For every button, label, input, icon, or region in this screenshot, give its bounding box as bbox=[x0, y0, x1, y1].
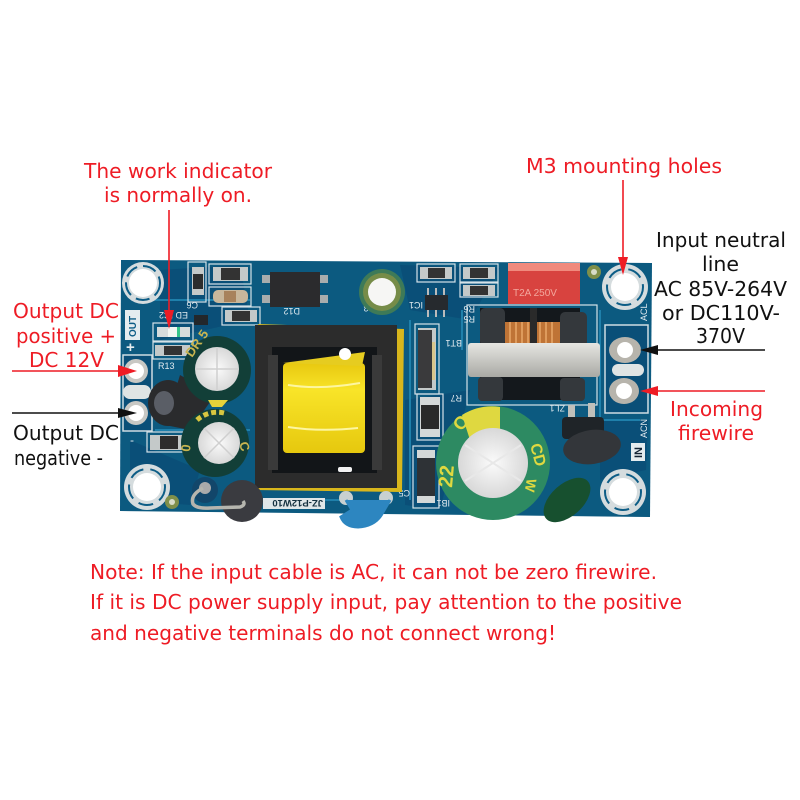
small via bbox=[165, 495, 179, 509]
callout: output DC negative: negative - bbox=[14, 446, 103, 470]
label: OUT: - bbox=[130, 433, 134, 447]
heading: work indicator callout: is normally on. bbox=[104, 183, 252, 207]
large electrolytic capacitor bbox=[435, 406, 550, 520]
capacitor top: DR 5 bbox=[182, 327, 211, 360]
silkscreen labels: IB1 bbox=[436, 498, 450, 508]
large electrolytic capacitor: O bbox=[449, 411, 473, 435]
capacitor bottom: 0 bbox=[178, 444, 194, 452]
transformer part label: JZ-P12W10 bbox=[272, 497, 323, 508]
callout: input neutral line: or DC110V- bbox=[662, 301, 780, 325]
arrow: output positive bbox=[12, 365, 137, 377]
silkscreen labels: ED IC2 bbox=[159, 310, 188, 320]
fuse: T2A 250V bbox=[513, 288, 557, 299]
note text: and negative terminals do not connect wrong! bbox=[90, 621, 556, 645]
input terminal pads bbox=[605, 325, 648, 413]
arrow: input neutral bbox=[640, 345, 765, 355]
capacitor C3 bbox=[359, 269, 405, 315]
capacitor top bbox=[182, 327, 251, 407]
silkscreen labels bbox=[158, 300, 649, 508]
callout: input neutral line: line bbox=[702, 252, 739, 276]
mounting hole top left bbox=[122, 262, 164, 304]
callout: input neutral line bbox=[654, 228, 787, 348]
silkscreen outlines bbox=[147, 262, 597, 508]
heading: mounting holes callout: M3 mounting holes bbox=[526, 154, 722, 178]
arrow: to mounting hole bbox=[618, 180, 628, 275]
arrow: incoming live bbox=[640, 386, 765, 396]
silkscreen labels: C6 bbox=[186, 300, 198, 310]
callout: output DC positive: Output DC bbox=[13, 299, 119, 323]
mounting hole bottom left bbox=[124, 464, 170, 510]
heading: work indicator callout: The work indicator bbox=[83, 159, 273, 183]
callout: output DC negative: Output DC bbox=[13, 421, 119, 445]
panel: circuit board photo bbox=[120, 260, 652, 531]
fuse bbox=[508, 263, 580, 304]
note text: Note: If the input cable is AC, it can not be zero firewire. bbox=[90, 560, 657, 584]
silkscreen labels: R5 bbox=[463, 314, 475, 324]
silkscreen labels: R6 bbox=[463, 304, 475, 314]
callout: incoming firewire: Incoming bbox=[670, 397, 763, 421]
callout: incoming firewire: firewire bbox=[678, 421, 754, 445]
inductor bbox=[148, 375, 215, 430]
green film capacitor bbox=[535, 469, 599, 531]
silkscreen labels: ACN bbox=[639, 419, 649, 438]
transformer bbox=[255, 324, 404, 492]
silkscreen labels: C3 bbox=[363, 303, 375, 313]
silkscreen labels: D12 bbox=[283, 306, 300, 316]
silkscreen labels: ACL bbox=[639, 303, 649, 321]
arrow: to indicator LED bbox=[164, 210, 174, 329]
mounting hole top right bbox=[602, 264, 648, 310]
NTC thermistor bbox=[561, 403, 623, 468]
common mode choke bbox=[468, 308, 600, 401]
label: OUT bbox=[125, 310, 140, 447]
label: OUT: + bbox=[126, 339, 135, 356]
silkscreen labels: IC1 bbox=[409, 300, 423, 310]
callout: output DC positive: positive + bbox=[16, 324, 116, 348]
callout: input neutral line: Input neutral bbox=[656, 228, 786, 252]
capacitor bottom: C bbox=[236, 440, 253, 453]
silkscreen labels: BT1 bbox=[445, 338, 462, 348]
arrow: output negative bbox=[12, 408, 137, 418]
large electrolytic capacitor: CD bbox=[526, 442, 549, 468]
mounting hole bottom right bbox=[600, 469, 646, 515]
heading: work indicator callout bbox=[83, 159, 273, 207]
large electrolytic capacitor: 22 bbox=[435, 464, 459, 488]
silkscreen labels: C5 bbox=[398, 488, 410, 498]
PCB base bbox=[120, 260, 652, 517]
callout: input neutral line: AC 85V-264V bbox=[654, 277, 787, 301]
blue capacitor bbox=[339, 491, 393, 527]
silkscreen labels: R7 bbox=[450, 393, 462, 403]
label: IN bbox=[631, 443, 645, 461]
silkscreen labels: ZL1 bbox=[549, 403, 565, 413]
callout: output DC negative bbox=[13, 421, 119, 470]
silkscreen labels: R13 bbox=[158, 361, 175, 371]
callout: output DC positive bbox=[13, 299, 119, 372]
SMD components bbox=[150, 267, 495, 503]
output terminal pads bbox=[123, 355, 152, 431]
capacitor bottom bbox=[178, 409, 253, 477]
wire loop and transistor bbox=[192, 477, 263, 522]
note text: If it is DC power supply input, pay attention to the positive bbox=[90, 590, 682, 614]
optocoupler chip bbox=[262, 272, 328, 307]
callout: output DC positive: DC 12V bbox=[29, 348, 104, 372]
label: IN: IN bbox=[633, 447, 645, 458]
callout: incoming firewire bbox=[670, 397, 763, 445]
large electrolytic capacitor: W bbox=[522, 477, 540, 494]
note text bbox=[90, 560, 682, 645]
label: OUT: OUT bbox=[128, 316, 139, 337]
callout: input neutral line: 370V bbox=[696, 324, 745, 348]
